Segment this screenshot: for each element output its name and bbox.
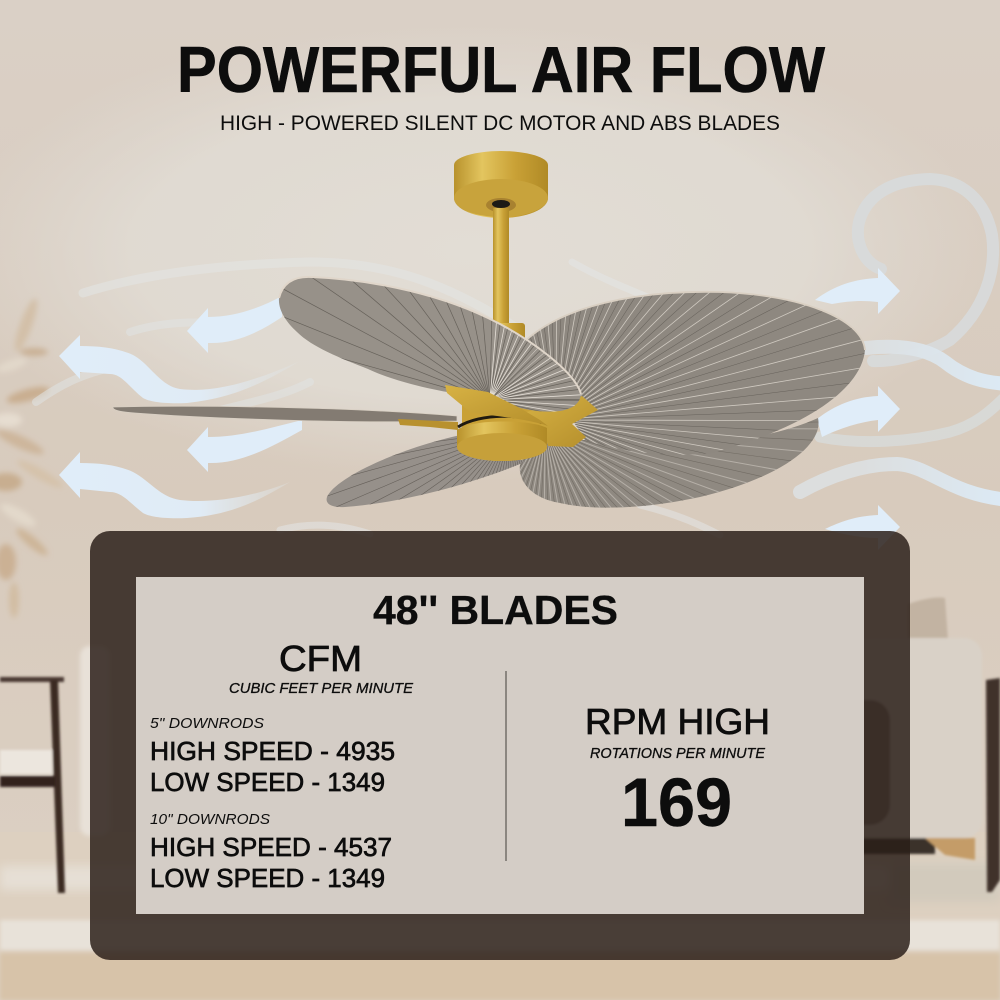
swirl: right lower: [820, 394, 1000, 442]
blade: thin left: [113, 406, 457, 422]
arrow: right middle: [817, 386, 900, 437]
panel: specifications inner: [136, 577, 864, 914]
wave: right upper: [866, 347, 1000, 384]
blade: lower left: [326, 436, 525, 508]
heading: blades: 48'' BLADES: [373, 587, 618, 633]
faint wave: upper left: [83, 262, 520, 330]
arrows: left side: [59, 296, 302, 518]
ceiling fan: [113, 151, 866, 508]
column: RPM: [585, 701, 770, 841]
blade bracket: front: [445, 385, 548, 426]
right sofa: [800, 597, 1000, 892]
blade bracket: right: [523, 396, 598, 447]
downrod: [493, 208, 509, 326]
arrow: left wave bottom: [59, 452, 290, 518]
value: 169: 169: [621, 764, 732, 841]
value: high speed 4537: HIGH SPEED - 4537: [150, 832, 392, 862]
coupler: [489, 323, 525, 347]
canopy: [454, 151, 548, 218]
blade: lower right: [520, 418, 818, 508]
left chair: [0, 677, 65, 893]
motor housing: [457, 421, 547, 461]
arrow: right top: [815, 268, 900, 314]
swirl: upper right: [858, 179, 993, 361]
blade bracket: left: [398, 419, 458, 430]
column: CFM: [150, 638, 413, 893]
air flow waves: [36, 179, 1000, 535]
arrow: upper left short: [187, 296, 282, 353]
arrow: lower left short: [187, 420, 302, 472]
RPM caption: ROTATIONS PER MINUTE: [590, 746, 765, 762]
label: 10 inch: 10" DOWNRODS: [150, 812, 270, 828]
group: 10 inch downrods: [150, 812, 392, 893]
faint wave: centre: [280, 262, 720, 535]
panel: specifications outer: [90, 531, 910, 960]
CFM caption: CUBIC FEET PER MINUTE: [229, 681, 413, 697]
subtitle: HIGH - POWERED SILENT DC MOTOR AND ABS BLADES: [220, 112, 780, 135]
group: 5 inch downrods: [150, 716, 395, 797]
faint wave: left: [36, 322, 310, 410]
label: 5 inch: 5" DOWNRODS: [150, 716, 264, 732]
arrows: right side: [815, 268, 900, 550]
blade: upper left: [278, 276, 582, 412]
arrow: left wave top: [59, 335, 300, 403]
arrow: right bottom: [825, 505, 900, 550]
heading: RPM high: RPM HIGH: [585, 701, 770, 742]
heading: CFM: CFM: [279, 638, 362, 679]
value: low speed 1349: LOW SPEED - 1349: [150, 767, 385, 797]
wave: right lower: [800, 464, 1000, 500]
pampas plant: [0, 297, 65, 618]
floor: [0, 832, 1000, 1000]
value: low speed 1349 second: LOW SPEED - 1349: [150, 863, 385, 893]
motor collar: [458, 404, 547, 428]
blade: right large: [527, 291, 866, 455]
value: high speed 4935: HIGH SPEED - 4935: [150, 736, 395, 766]
white cushion behind panel: [80, 646, 110, 836]
title: POWERFUL AIR FLOW: [177, 33, 826, 106]
